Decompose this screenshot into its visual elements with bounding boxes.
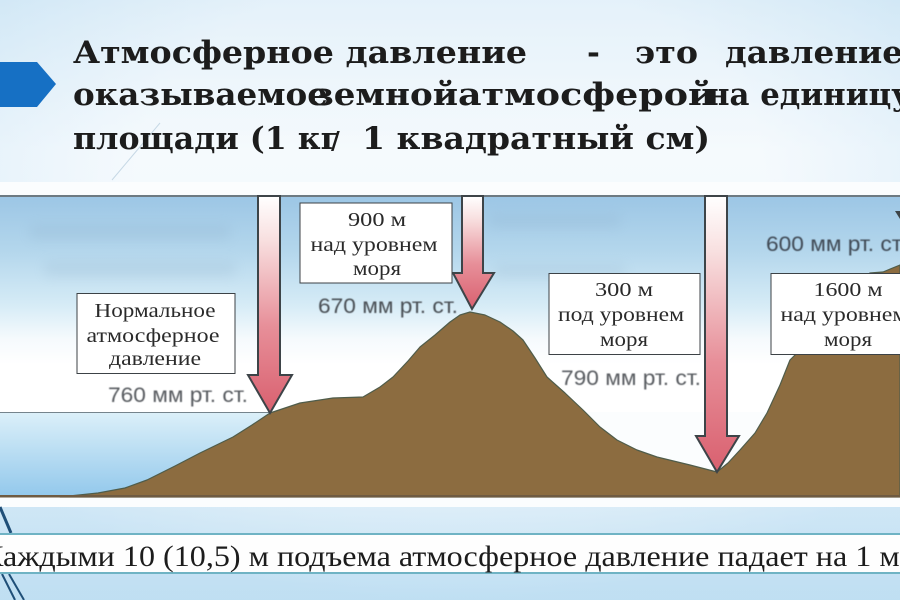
arrow: normal pressure bbox=[248, 196, 292, 413]
pressure label: 670: 670 мм рт. ст. bbox=[318, 295, 458, 318]
icon: blue pentagon marker bbox=[0, 62, 56, 107]
sea below normal level bbox=[0, 412, 300, 497]
title: площади (1 кг bbox=[73, 121, 340, 157]
title: 1 квадратный см) bbox=[362, 121, 710, 157]
title: / bbox=[331, 126, 340, 155]
panel: diagram bbox=[0, 195, 900, 498]
panel: diagram band bbox=[0, 182, 900, 507]
title bbox=[73, 35, 900, 157]
callout strip: pressure rule: Каждыми 10 (10,5) м подъема атмосферное давление падает на 1 мм bbox=[0, 540, 900, 573]
callout: 900 m bbox=[300, 203, 452, 283]
title: это bbox=[635, 35, 698, 71]
title: - bbox=[587, 35, 600, 71]
callout: 1600 m: моря bbox=[824, 329, 872, 351]
pressure label: 790: 790 мм рт. ст. bbox=[561, 367, 701, 390]
arrow: 300 m below sea level bbox=[696, 196, 739, 472]
callout: 300 m: моря bbox=[600, 329, 648, 351]
callout: 1600 m: над уровнем bbox=[780, 304, 900, 326]
callout: 900 m: 900 м bbox=[348, 209, 406, 231]
callout: 900 m: над уровнем bbox=[310, 234, 438, 256]
title: оказываемое bbox=[73, 77, 328, 113]
callout: normal pressure: Нормальное bbox=[94, 300, 216, 322]
sky bbox=[0, 196, 900, 412]
pressure label: 600: 600 мм рт. ст. bbox=[766, 233, 900, 256]
callout: normal pressure: атмосферное bbox=[86, 325, 220, 347]
callout: 300 m: 300 м bbox=[595, 279, 653, 301]
arrow: 1600 m tip bbox=[895, 211, 900, 219]
title: земной bbox=[312, 77, 458, 113]
callout: normal pressure: давление bbox=[109, 348, 201, 370]
callout: 300 m: под уровнем bbox=[558, 304, 684, 326]
callout: normal pressure bbox=[77, 294, 235, 374]
arrow: 900 m bbox=[453, 196, 494, 309]
callout: 900 m: моря bbox=[353, 258, 401, 280]
terrain bbox=[60, 265, 900, 497]
pressure label: 760: 760 мм рт. ст. bbox=[108, 384, 248, 407]
decorative dark lines bbox=[0, 507, 24, 600]
callout: 300 m bbox=[549, 274, 700, 354]
title: давление bbox=[725, 35, 900, 71]
title: атмосферой bbox=[458, 77, 715, 113]
top line bbox=[0, 195, 900, 197]
callout: 1600 m: 1600 м bbox=[814, 279, 883, 301]
callout: 1600 m bbox=[771, 274, 900, 354]
title: Атмосферное давление bbox=[73, 35, 527, 71]
